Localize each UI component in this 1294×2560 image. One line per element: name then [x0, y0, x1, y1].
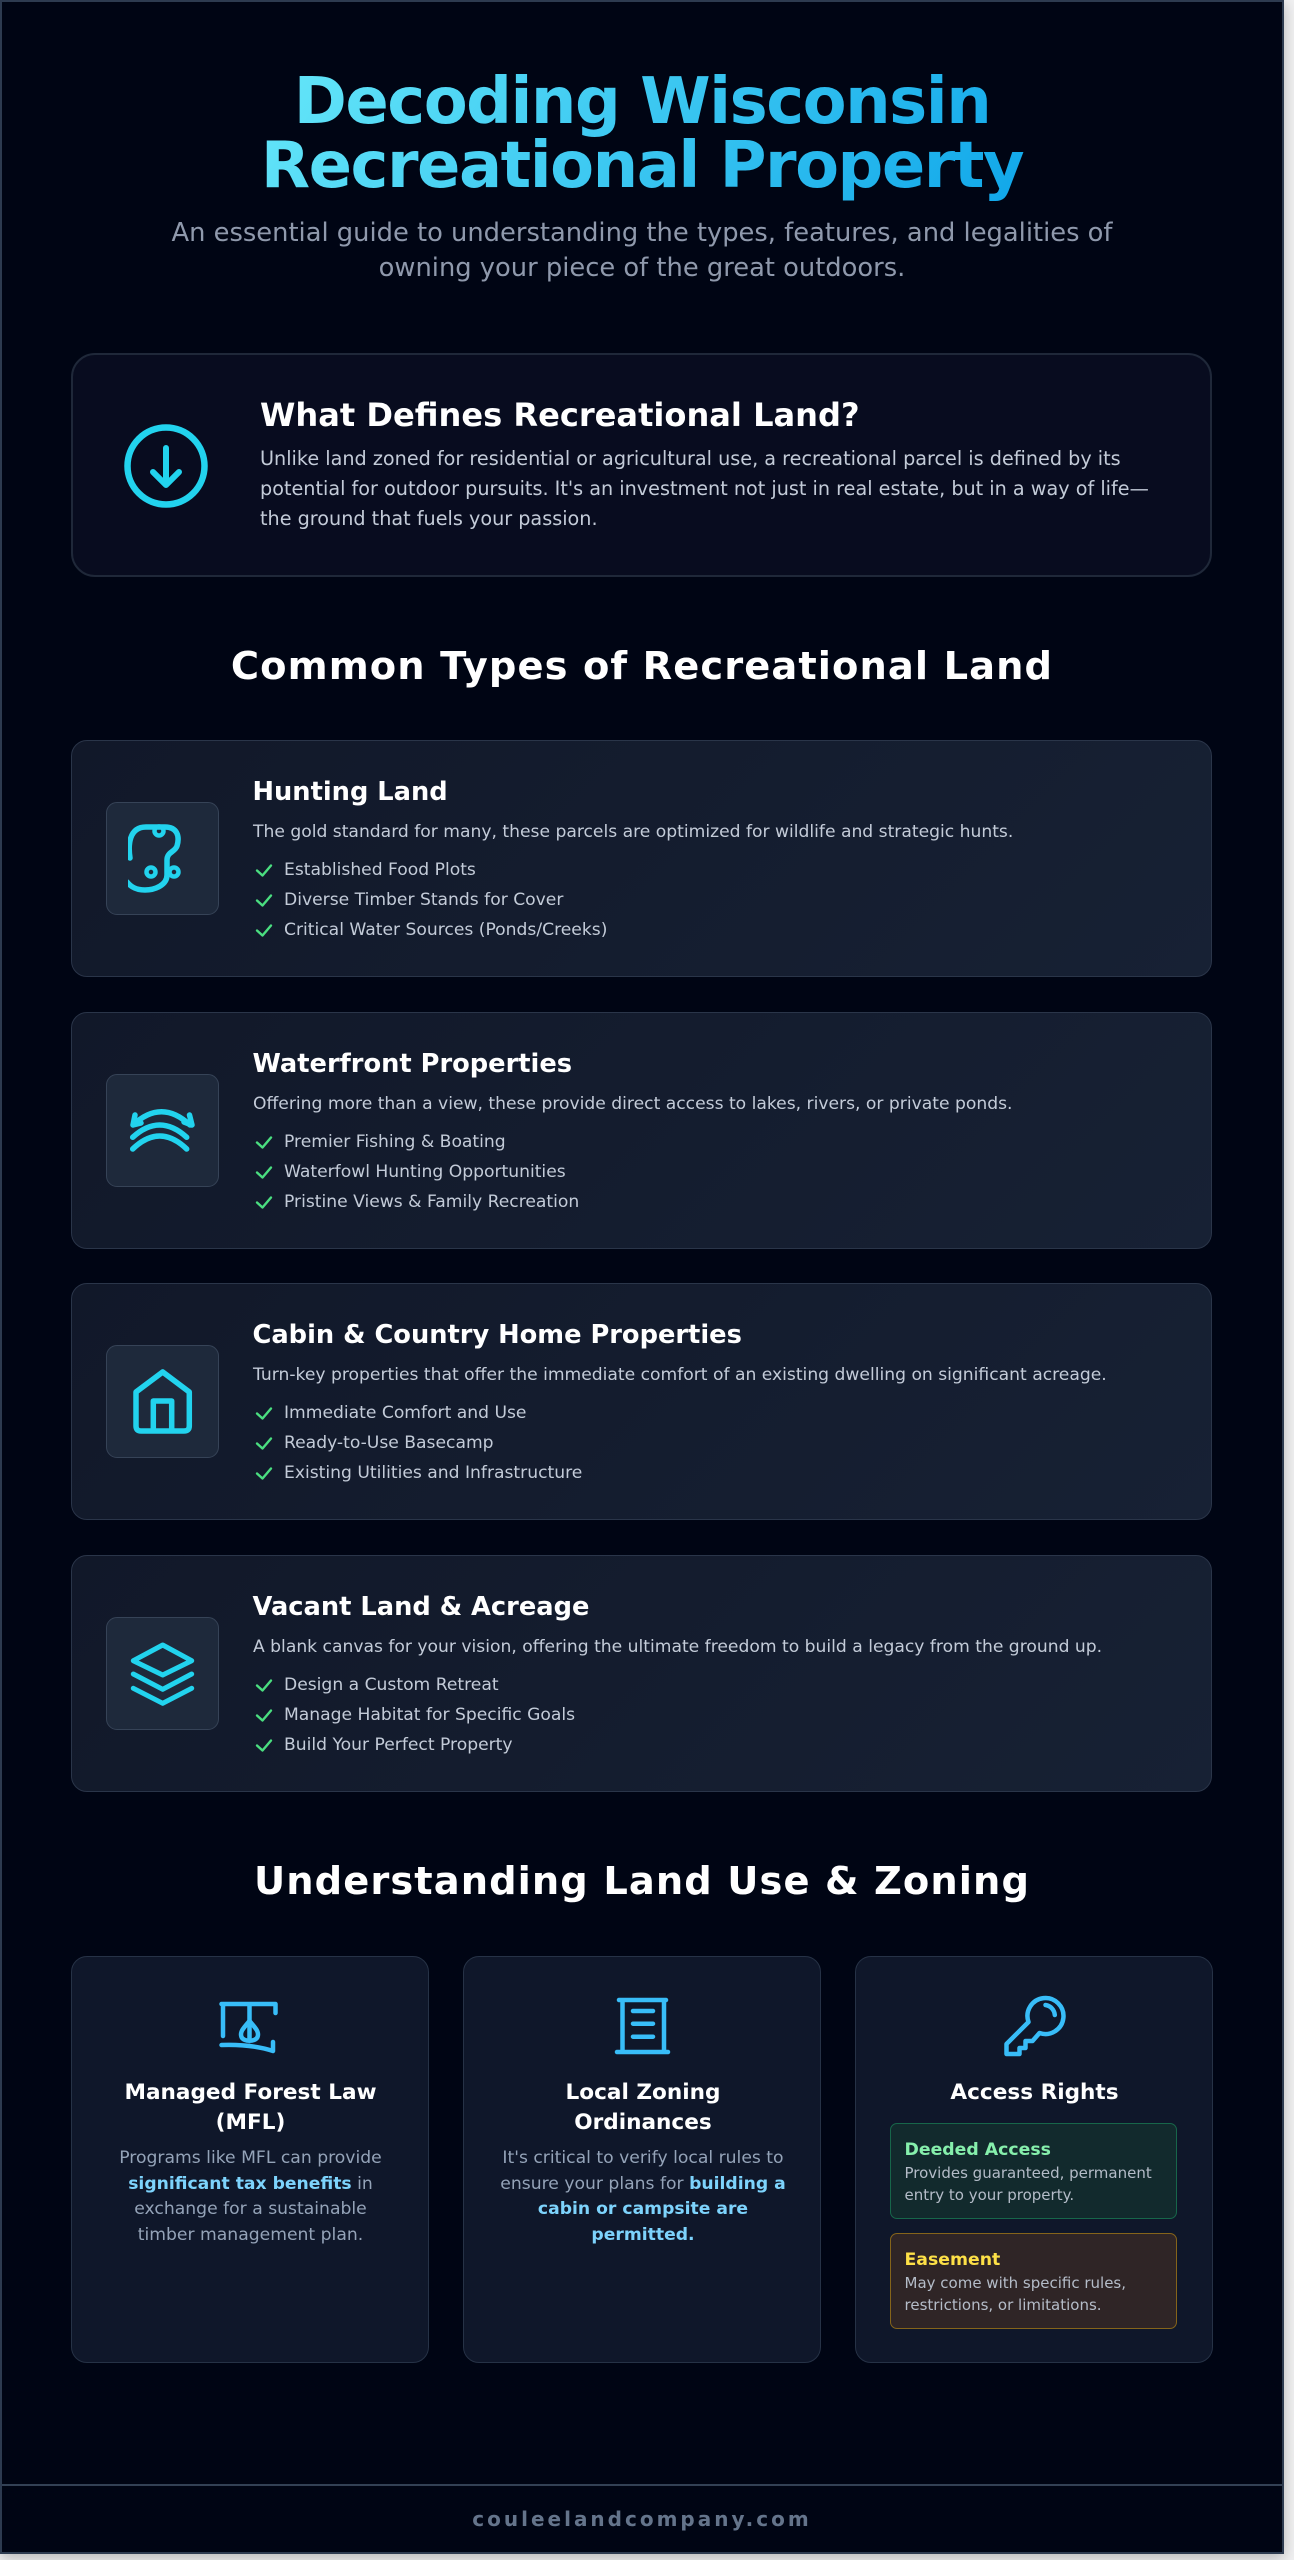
panel: vacant land: [71, 1555, 1212, 1792]
title: Decoding Wisconsin: [294, 64, 990, 138]
text: vacant description: A blank canvas for your vision, offering the ultimate freedom to build a legacy from the ground up.: [253, 1637, 1102, 1657]
text: cabin description: Turn-key properties that offer the immediate comfort of an existing dwelling on significant acreage.: [253, 1365, 1107, 1385]
callout: deeded access: [890, 2123, 1177, 2219]
heading: zoning: Local Zoning: [566, 2080, 720, 2105]
text: definition: [260, 447, 1149, 530]
list item: Established Food Plots: [284, 860, 476, 880]
text: waterfront description: Offering more than a view, these provide direct access to lakes, rivers, or private ponds.: [253, 1094, 1012, 1114]
text: zoning description: ensure your plans for building a: [500, 2174, 786, 2194]
heading: access rights: Access Rights: [950, 2080, 1119, 2105]
text: zoning description: permitted.: [591, 2225, 695, 2245]
subtitle: [171, 218, 1113, 283]
icon: forest book: [219, 2002, 278, 2054]
panel: local zoning ordinances: [463, 1956, 820, 2363]
list item: Critical Water Sources (Ponds/Creeks): [284, 920, 607, 940]
icon: house: [106, 1345, 219, 1458]
subtitle: An essential guide to understanding the types, features, and legalities of: [171, 218, 1112, 248]
text: definition: potential for outdoor pursuits. It's an investment not just in real estate, but in a way of life—: [260, 477, 1149, 500]
heading: waterfront: Waterfront Properties: [252, 1049, 572, 1079]
heading: MFL: Managed Forest Law: [124, 2080, 377, 2105]
text: MFL description: timber management plan.: [138, 2225, 363, 2245]
panel: what defines recreational land: [71, 353, 1212, 577]
text: MFL description: Programs like MFL can provide: [119, 2148, 382, 2168]
panel: hunting land: [71, 740, 1212, 977]
text: deeded description: Provides guaranteed, permanent: [904, 2164, 1152, 2182]
heading: vacant land: Vacant Land & Acreage: [252, 1592, 589, 1622]
title: Recreational Property: [261, 128, 1023, 202]
text: zoning description: cabin or campsite are: [538, 2199, 748, 2219]
text: zoning description: [500, 2148, 786, 2245]
heading: MFL: (MFL): [216, 2110, 285, 2135]
label: easement: Easement: [904, 2250, 1000, 2270]
list item: Build Your Perfect Property: [284, 1735, 513, 1755]
list item: Pristine Views & Family Recreation: [284, 1192, 579, 1212]
callout: easement: [890, 2233, 1177, 2329]
panel: cabin and country home: [71, 1283, 1212, 1520]
text: MFL description: [119, 2148, 382, 2245]
heading: zoning: Ordinances: [574, 2110, 712, 2135]
icon: hunting: [106, 802, 219, 915]
footer: [0, 2484, 1284, 2552]
heading: zoning: [566, 2080, 720, 2135]
footer link text: couleelandcompany.com: [472, 2507, 812, 2531]
heading: hunting land: Hunting Land: [252, 777, 448, 807]
panel: waterfront properties: [71, 1012, 1212, 1249]
heading: what defines: What Defines Recreational Land?: [260, 396, 860, 434]
heading: common types: Common Types of Recreational Land: [231, 644, 1053, 689]
text: hunting description: The gold standard for many, these parcels are optimized for wildlife and strategic hunts.: [253, 822, 1013, 842]
subtitle: owning your piece of the great outdoors.: [379, 253, 905, 283]
text: zoning description: It's critical to verify local rules to: [502, 2148, 784, 2168]
list item: Manage Habitat for Specific Goals: [284, 1705, 575, 1725]
list item: Premier Fishing & Boating: [284, 1132, 506, 1152]
panel: managed forest law: [70, 1956, 428, 2363]
list item: Design a Custom Retreat: [284, 1675, 499, 1695]
heading: MFL: [124, 2080, 377, 2135]
icon: down arrow circle: [124, 424, 208, 508]
icon: water waves: [106, 1074, 219, 1187]
heading: land use and zoning: Understanding Land Use & Zoning: [254, 1859, 1030, 1904]
list item: Immediate Comfort and Use: [284, 1403, 526, 1423]
list item: Existing Utilities and Infrastructure: [284, 1463, 582, 1483]
text: easement description: restrictions, or limitations.: [904, 2296, 1102, 2314]
icon: layers: [106, 1617, 219, 1730]
text: MFL description: significant tax benefits in: [128, 2174, 373, 2194]
text: easement description: May come with specific rules,: [904, 2274, 1126, 2292]
list item: Diverse Timber Stands for Cover: [284, 890, 563, 910]
panel: access rights: [854, 1956, 1212, 2363]
text: definition: the ground that fuels your passion.: [260, 507, 598, 530]
icon: document: [614, 1998, 670, 2054]
title: [242, 70, 1042, 210]
text: deeded description: [904, 2164, 1152, 2204]
text: easement description: [904, 2274, 1126, 2314]
text: deeded description: entry to your property.: [904, 2186, 1074, 2204]
icon: key: [1004, 1996, 1066, 2056]
list item: Ready-to-Use Basecamp: [284, 1433, 494, 1453]
heading: cabin: Cabin & Country Home Properties: [252, 1320, 742, 1350]
list item: Waterfowl Hunting Opportunities: [284, 1162, 566, 1182]
text: MFL description: exchange for a sustainable: [134, 2199, 367, 2219]
label: deeded: Deeded Access: [904, 2140, 1051, 2160]
text: definition: Unlike land zoned for residential or agricultural use, a recreational parcel is defined by its: [260, 447, 1121, 470]
